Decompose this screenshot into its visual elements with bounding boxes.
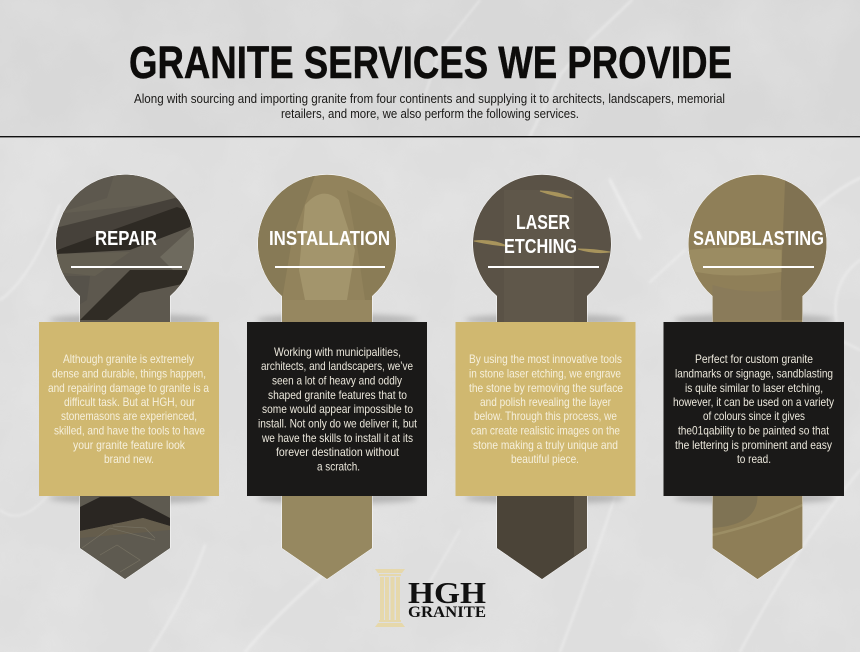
repair text: your granite feature look [73, 438, 186, 452]
repair text: difficult task. But at HGH, our [64, 395, 195, 409]
installation text: install. Not only do we deliver it, but [258, 416, 418, 430]
title: GRANITE SERVICES WE PROVIDE [129, 37, 732, 88]
sandblasting card [664, 322, 844, 496]
sandblasting text: the lettering is prominent and easy [675, 438, 832, 452]
repair text: brand new. [104, 452, 154, 466]
card shadow [674, 314, 834, 504]
laser etching text: beautiful piece. [511, 452, 579, 466]
installation photo shape [257, 170, 397, 586]
installation text: a scratch. [317, 460, 360, 474]
repair heading: REPAIR [95, 228, 157, 250]
card shadow [465, 314, 625, 504]
laser etching heading: LASER [516, 212, 570, 234]
laser etching text: can create realistic images on the [471, 424, 620, 438]
laser etching text: below. Through this process, we [474, 409, 617, 423]
installation text: shaped granite features that to [268, 388, 407, 402]
installation text: Working with municipalities, [274, 345, 401, 359]
laser etching card [456, 322, 636, 496]
repair text: and repairing damage to granite is a [48, 381, 209, 395]
sandblasting text: Perfect for custom granite [695, 352, 813, 366]
logo wordmark: HGH [408, 575, 486, 610]
sandblasting photo shape [688, 170, 828, 586]
sandblasting text: however, it can be used on a variety [673, 395, 834, 409]
repair card [39, 322, 219, 496]
icon: pillar [375, 569, 405, 627]
laser etching text: the stone by removing the surface [469, 381, 623, 395]
sandblasting underline [703, 266, 814, 268]
repair text: skilled, and have the tools to have [54, 424, 205, 438]
laser etching text: and polish revealing the layer [480, 395, 611, 409]
laser etching underline [488, 266, 599, 268]
panel: sandblasting [664, 170, 844, 586]
installation heading: INSTALLATION [269, 228, 390, 250]
laser etching text: By using the most innovative tools [469, 352, 622, 366]
laser etching heading [504, 212, 577, 258]
sandblasting text: to read. [737, 452, 771, 466]
logo wordmark: GRANITE [408, 604, 486, 621]
repair text: stonemasons are experienced, [61, 409, 197, 423]
installation text: forever destination without [276, 445, 400, 459]
repair underline [71, 266, 182, 268]
installation card [247, 322, 427, 496]
installation text: some would appear impossible to [262, 402, 413, 416]
sandblasting text: landmarks or signage, sandblasting [675, 366, 833, 380]
installation text: architects, and landscapers, we’ve [261, 359, 413, 373]
intro text: Along with sourcing and importing granite from four continents and supplying it to architects, landscapers, memorial [134, 92, 725, 106]
logo: HGH Granite [375, 569, 486, 627]
installation text: we have the skills to install it at its [261, 431, 413, 445]
laser etching photo shape [472, 170, 612, 586]
repair text: Although granite is extremely [63, 352, 194, 366]
card shadow [49, 314, 209, 504]
sandblasting heading: SANDBLASTING [693, 228, 824, 250]
intro text [134, 92, 725, 121]
repair text: dense and durable, things happen, [52, 366, 206, 380]
installation text: seen a lot of heavy and oddly [272, 374, 402, 388]
panel: installation [247, 170, 427, 586]
installation text [258, 345, 418, 474]
panel: laser etching [456, 170, 636, 586]
intro text: retailers, and more, we also perform the following services. [281, 107, 579, 121]
repair photo shape [55, 170, 195, 587]
laser etching heading: ETCHING [504, 236, 577, 258]
card shadow [257, 314, 417, 504]
header divider [0, 136, 860, 137]
laser etching text [469, 352, 623, 466]
laser etching text: in stone laser etching, we engrave [469, 366, 621, 380]
installation underline [275, 266, 385, 268]
sandblasting text: is quite similar to laser etching, [685, 381, 823, 395]
panel: repair [39, 170, 219, 587]
sandblasting text [673, 352, 834, 466]
sandblasting text: of colours since it gives [703, 409, 805, 423]
laser etching text: stone making a truly unique and [473, 438, 618, 452]
repair text [48, 352, 209, 466]
sandblasting text: the01qability to be painted so that [678, 424, 830, 438]
